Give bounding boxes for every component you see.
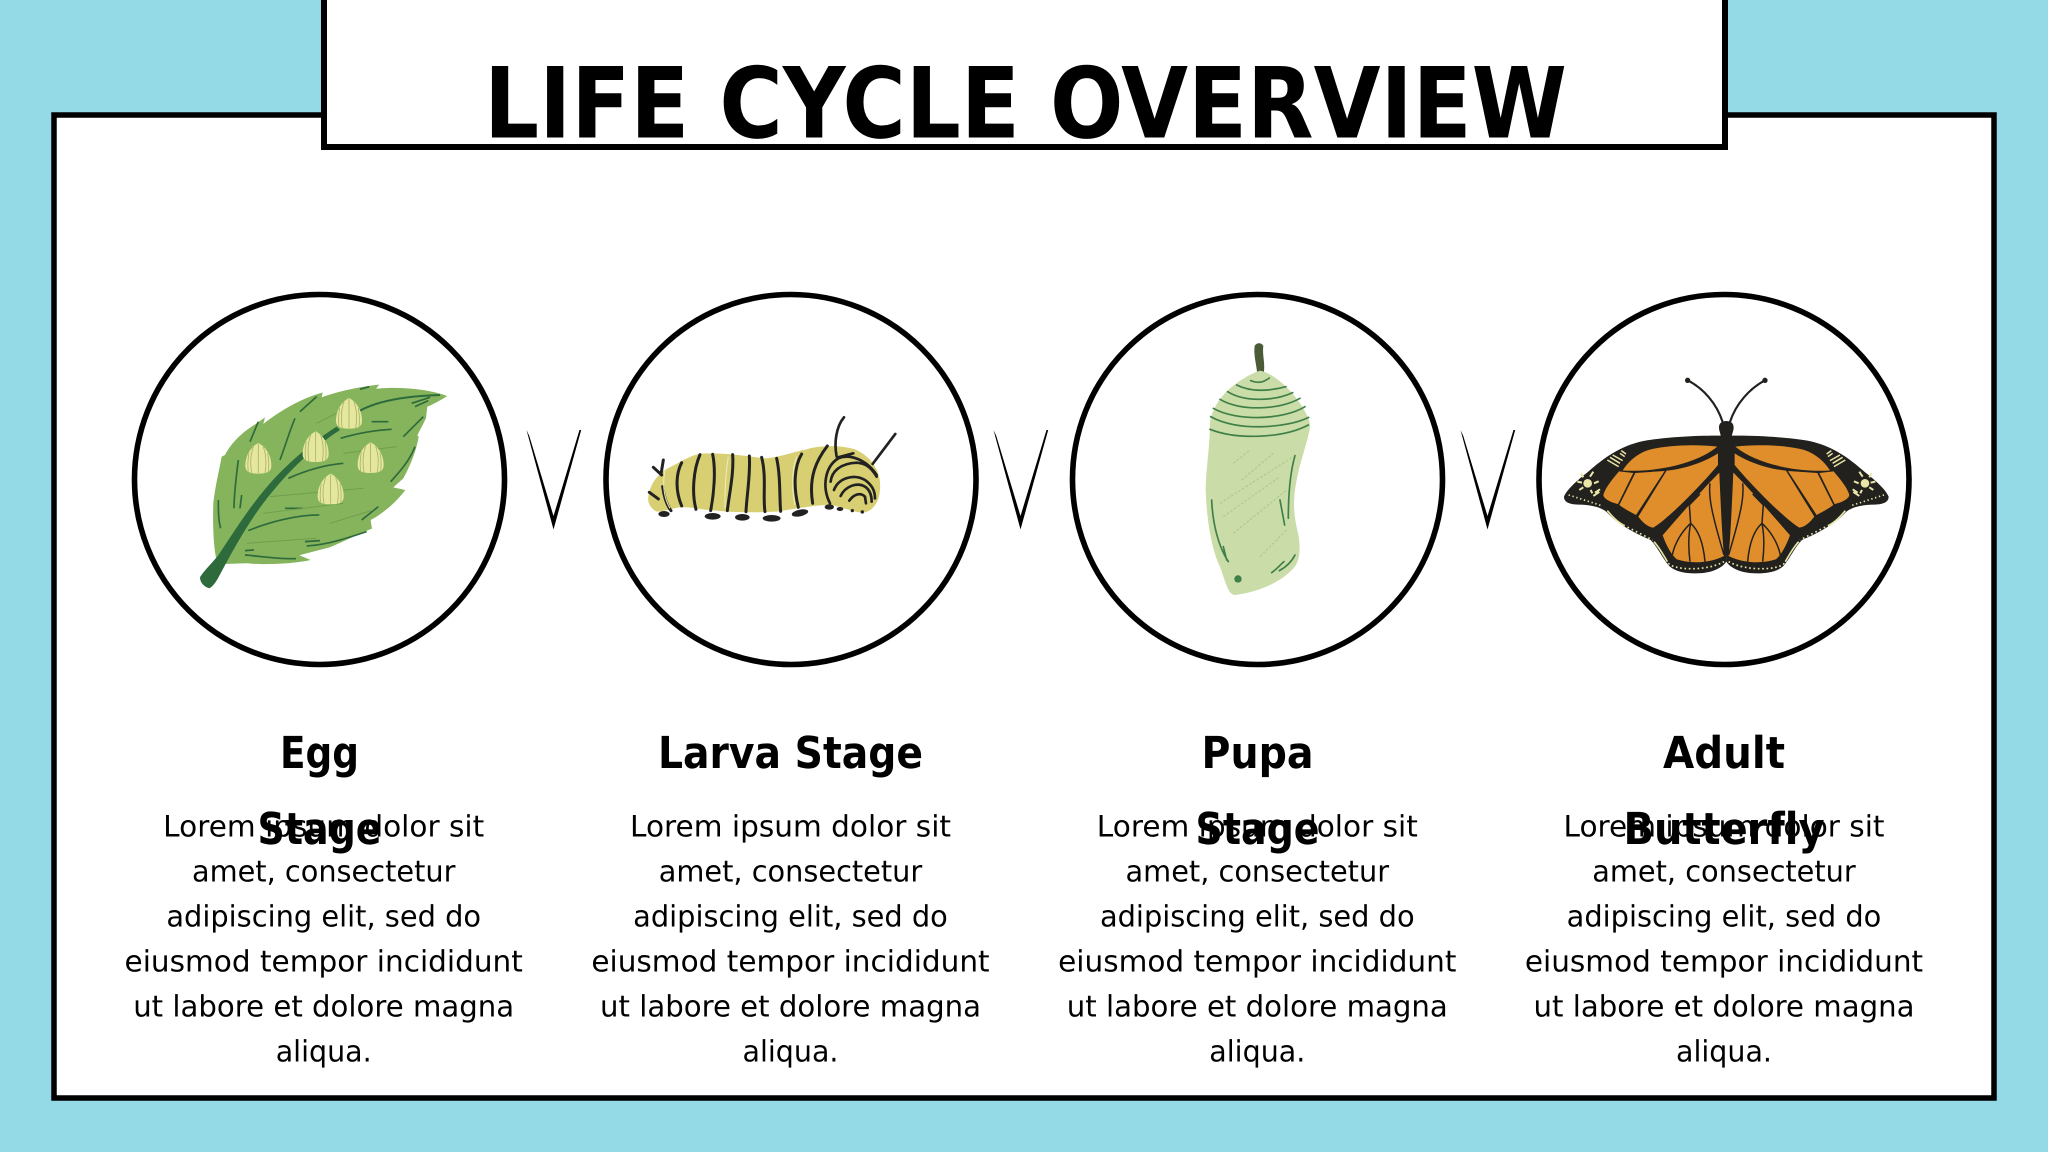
icon: leaf with eggs	[200, 385, 447, 588]
heading: adult butterfly	[1624, 728, 1824, 855]
text: larva description: aliqua.	[742, 1035, 838, 1069]
text: egg description: aliqua.	[276, 1035, 372, 1069]
text: larva description: Lorem ipsum dolor sit	[630, 810, 951, 844]
stage: adult	[1525, 294, 1923, 1069]
text: pupa description: ut labore et dolore magna	[1067, 990, 1448, 1024]
text: larva description: eiusmod tempor incididunt	[591, 945, 990, 979]
heading: pupa stage	[1196, 728, 1320, 855]
arrow: egg to larva	[526, 430, 581, 530]
text: pupa description: adipiscing elit, sed do	[1100, 900, 1415, 934]
text: pupa description: eiusmod tempor incididunt	[1058, 945, 1456, 979]
heading: egg stage: Stage	[258, 804, 382, 855]
heading: larva stage: Larva Stage	[658, 728, 923, 779]
text: adult description: ut labore et dolore magna	[1534, 990, 1914, 1024]
stage: egg	[125, 294, 523, 1069]
stage: larva	[591, 294, 990, 1069]
circle: egg	[134, 294, 504, 664]
text: larva description: ut labore et dolore magna	[600, 990, 981, 1024]
circle: larva	[606, 294, 976, 664]
text: adult description: eiusmod tempor incididunt	[1525, 945, 1923, 979]
text: pupa description: Lorem ipsum dolor sit	[1097, 810, 1418, 844]
icon: monarch butterfly	[1564, 378, 1889, 573]
text: egg description: amet, consectetur	[192, 855, 456, 889]
heading: adult butterfly: Adult	[1663, 728, 1785, 779]
text: larva description: amet, consectetur	[659, 855, 923, 889]
panel: title box	[324, 0, 1725, 147]
circle: adult	[1539, 294, 1909, 664]
text: adult description: Lorem ipsum dolor sit	[1564, 810, 1884, 844]
heading: adult butterfly: Butterfly	[1624, 804, 1824, 855]
text: egg description: adipiscing elit, sed do	[166, 900, 481, 934]
heading: pupa stage: Stage	[1196, 804, 1320, 855]
arrow: pupa to adult	[1460, 430, 1515, 530]
text: pupa description: aliqua.	[1209, 1035, 1305, 1069]
stage: pupa	[1058, 294, 1456, 1069]
text: egg description: eiusmod tempor incididunt	[125, 945, 523, 979]
text: larva description	[591, 810, 990, 1069]
title: LIFE CYCLE OVERVIEW	[484, 48, 1567, 162]
text: adult description: aliqua.	[1676, 1035, 1772, 1069]
heading: egg stage: Egg	[280, 728, 359, 779]
text: pupa description	[1058, 810, 1456, 1069]
text: adult description	[1525, 810, 1923, 1069]
icon: caterpillar	[648, 417, 895, 522]
text: egg description: Lorem ipsum dolor sit	[163, 810, 484, 844]
icon: chrysalis	[1206, 343, 1310, 595]
text: larva description: adipiscing elit, sed do	[633, 900, 948, 934]
text: egg description	[125, 810, 523, 1069]
circle: pupa	[1072, 294, 1442, 664]
text: pupa description: amet, consectetur	[1126, 855, 1390, 889]
heading: pupa stage: Pupa	[1202, 728, 1314, 779]
text: adult description: amet, consectetur	[1592, 855, 1857, 889]
text: adult description: adipiscing elit, sed do	[1567, 900, 1881, 934]
arrow: larva to pupa	[994, 430, 1048, 530]
heading: egg stage	[258, 728, 382, 855]
text: egg description: ut labore et dolore magna	[133, 990, 514, 1024]
